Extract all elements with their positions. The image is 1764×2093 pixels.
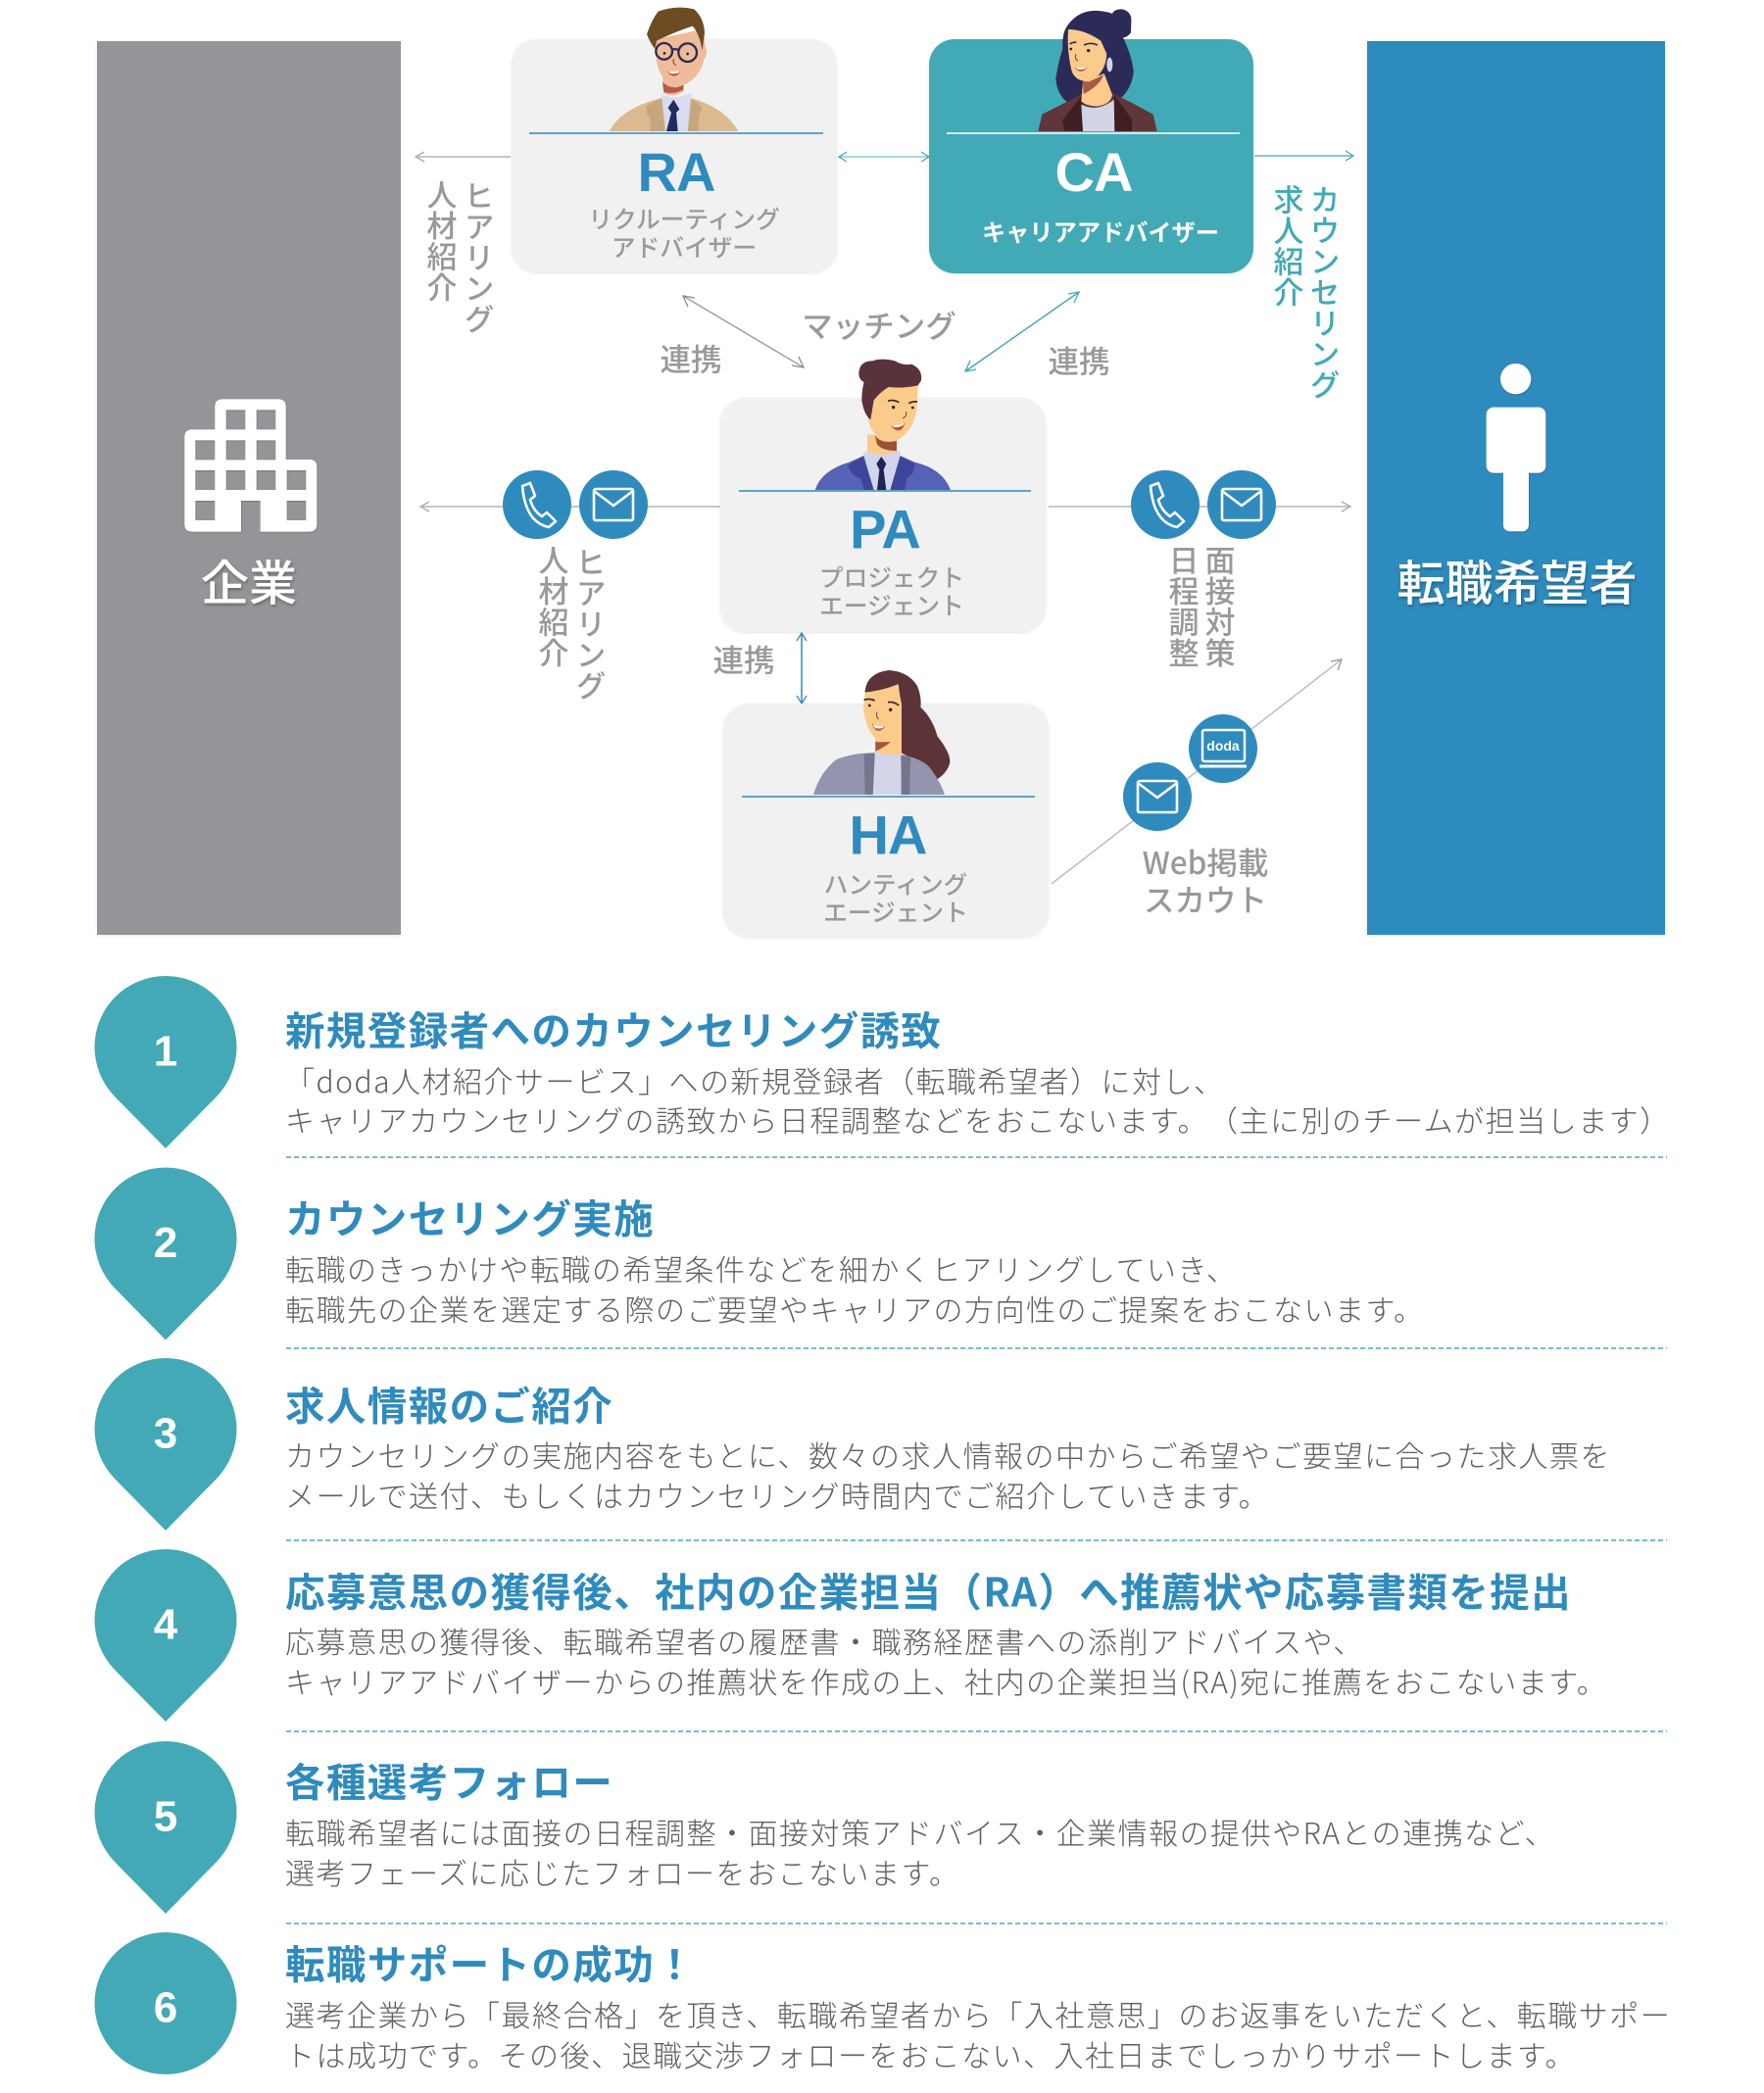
card: HA [723,670,1049,937]
text 3: カウンセリングの実施内容をもとに、数々の求人情報の中からご希望やご要望に合った求人票を [285,1433,1611,1476]
labels: RA to company [419,179,502,335]
heading 1: 新規登録者へのカウンセリング誘致 [285,999,942,1056]
heading 6: 転職サポートの成功！ [285,1932,696,1991]
code: CA: CA [1055,141,1132,203]
text 4 [285,1619,1607,1702]
heading 5: 各種選考フォロー [285,1750,613,1809]
heading 4: 応募意思の獲得後、社内の企業担当（RA）へ推薦状や応募書類を提出 [285,1560,1572,1619]
text 2: 転職のきっかけや転職の希望条件などを細かくヒアリングしていき、 [285,1246,1237,1290]
text 3 [285,1433,1611,1516]
step 5 [95,1741,1555,1914]
labels: PA to company: 人材紹介 [531,545,576,668]
pin 3: 3 [154,1409,177,1458]
code: PA: PA [850,498,920,560]
labels: PA to seeker [1162,545,1243,668]
pin 1 [95,976,237,1148]
role: PA [819,559,964,622]
heading 3: 求人情報のご紹介 [285,1374,613,1433]
step 2 [95,1167,1425,1340]
text 6: 選考企業から「最終合格」を頂き、転職希望者から「入社意思」のお返事をいただくと、転職サポー [285,1992,1671,2035]
pin 2: 2 [154,1219,177,1267]
labels: CA to seeker: 求人紹介 [1266,184,1311,308]
label: job seeker: 転職希望者 [1396,545,1638,615]
step 1 [95,976,1671,1148]
label: cooperation PA-HA: 連携 [712,636,775,681]
label: cooperation CA-PA: 連携 [1048,337,1110,382]
pin 5 [95,1741,237,1914]
pin 5: 5 [154,1793,177,1840]
text 6: トは成功です。その後、退職交渉フォローをおこない、入社日までしっかりサポートします。 [285,2032,1576,2075]
text 6 [285,1992,1671,2075]
labels: RA to company: 人材紹介 [419,179,465,303]
connector lines and arrows [416,151,1353,884]
pin 4 [95,1549,237,1722]
code: HA: HA [850,803,926,866]
pin 4: 4 [154,1601,178,1648]
label: web listing and scout: スカウト [1144,876,1267,921]
role: HA [823,866,968,929]
labels: PA to company [531,545,613,702]
icon: doda web listing [1189,714,1257,783]
card: PA [720,360,1046,632]
pin 1: 1 [154,1027,177,1076]
figure: HA woman [813,670,950,795]
figure: RA man [610,8,738,131]
icons: left phone and mail [503,470,648,539]
labels: PA to seeker: 日程調整 [1162,545,1205,668]
heading 2: カウンセリング実施 [285,1188,655,1244]
label: matching: マッチング [802,302,956,347]
pin 6 [94,1932,237,2074]
text 1 [285,1058,1671,1141]
step 4 [95,1549,1607,1722]
pin 3 [95,1358,237,1531]
role: HA: ハンティング [824,866,967,901]
step 3 [95,1358,1611,1531]
text 5: 転職希望者には面接の日程調整・面接対策アドバイス・企業情報の提供やRAとの連携など、 [285,1810,1555,1853]
labels: PA to seeker: 面接対策 [1198,545,1243,668]
role: HA: エージェント [823,894,968,929]
text 3: メールで送付、もしくはカウンセリング時間内でご紹介していきます。 [285,1473,1269,1516]
role: PA: プロジェクト [819,559,964,594]
label: cooperation RA-PA: 連携 [660,335,722,380]
pin 2 [95,1167,237,1340]
labels: CA to seeker [1266,184,1347,400]
code: RA: RA [638,141,714,203]
labels: CA to seeker: カウンセリング [1303,184,1347,400]
text 5: 選考フェーズに応じたフォローをおこないます。 [285,1850,960,1893]
label: web listing and scout [1143,839,1268,921]
panel: job seeker [1367,41,1665,935]
labels: RA to company: ヒアリング [457,180,502,335]
icon: person [1487,364,1545,531]
text 1: 「doda人材紹介サービス」への新規登録者（転職希望者）に対し、 [285,1058,1225,1101]
icon: building [184,399,317,532]
icons: right phone and mail [1131,470,1276,539]
text 4: 応募意思の獲得後、転職希望者の履歴書・職務経歴書への添削アドバイスや、 [285,1619,1364,1662]
card: RA [512,8,837,272]
text 1: キャリアカウンセリングの誘致から日程調整などをおこないます。（主に別のチームが担当します） [285,1097,1671,1141]
label: web listing and scout: Web掲載 [1143,839,1268,884]
text 4: キャリアアドバイザーからの推薦状を作成の上、社内の企業担当(RA)宛に推薦をおこないます。 [285,1659,1607,1702]
label: company: 企業 [201,545,297,615]
labels: PA to company: ヒアリング [568,547,613,702]
role: RA: リクルーティング [588,200,780,235]
pin 6: 6 [154,1983,177,2032]
icon: mail scout [1123,762,1192,831]
text 5 [285,1810,1555,1893]
card: CA [929,9,1253,273]
figure: CA woman [1038,9,1157,131]
role: RA: アドバイザー [612,229,757,265]
icon: doda web listing: doda [1206,738,1240,754]
figure: PA man [815,360,951,490]
step 6 [94,1932,1671,2075]
text 2: 転職先の企業を選定する際のご要望やキャリアの方向性のご提案をおこないます。 [285,1287,1425,1330]
role: PA: エージェント [819,587,964,622]
role: RA [588,200,780,265]
panel: company [97,41,401,935]
text 2 [285,1246,1425,1330]
role: CA: キャリアアドバイザー [982,214,1219,248]
